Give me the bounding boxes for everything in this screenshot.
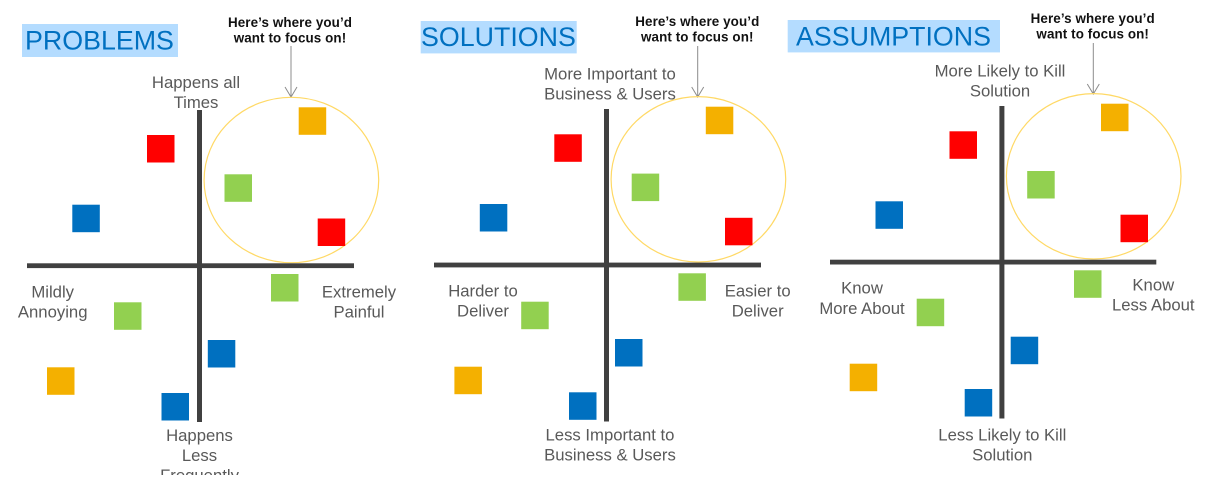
axis label: top: Happens all bbox=[152, 73, 240, 92]
axis label: left: Annoying bbox=[18, 302, 87, 322]
sticky notes bbox=[850, 104, 1148, 416]
vertical axis bbox=[999, 106, 1004, 418]
callout: focus area: Here’s where you’d bbox=[635, 14, 759, 29]
axis label: bottom: Business & Users bbox=[544, 446, 676, 465]
axis label: left: Deliver bbox=[457, 302, 509, 321]
arrow: to focus circle bbox=[285, 46, 297, 97]
heading: problems: PROBLEMS bbox=[25, 26, 174, 56]
panel: assumptions bbox=[788, 11, 1195, 465]
horizontal axis bbox=[434, 263, 761, 267]
callout: focus area: Here’s where you’d bbox=[228, 15, 352, 30]
callout: focus area: want to focus on! bbox=[640, 30, 754, 44]
axis label: bottom: Less bbox=[182, 446, 217, 465]
axis label: right: Know bbox=[1132, 276, 1175, 295]
sticky notes bbox=[454, 107, 752, 420]
axis label: bottom: Solution bbox=[972, 446, 1032, 465]
axis label: right: Painful bbox=[333, 302, 385, 322]
horizontal axis bbox=[27, 263, 354, 268]
focus circle bbox=[204, 97, 379, 263]
callout: focus area: want to focus on! bbox=[1035, 26, 1149, 42]
axis label: bottom: Less Important to bbox=[546, 426, 674, 445]
axis label: top: More Likely to Kill bbox=[935, 62, 1065, 81]
arrow: to focus circle bbox=[692, 46, 704, 97]
axis label: left: More About bbox=[819, 299, 905, 318]
axis label: right: Extremely bbox=[322, 282, 397, 302]
axis label: left: Mildly bbox=[31, 282, 75, 302]
heading: solutions: SOLUTIONS bbox=[421, 22, 576, 52]
axis label: top: Solution bbox=[970, 82, 1030, 101]
panel: solutions bbox=[421, 14, 791, 465]
axis label: right: Easier to bbox=[725, 282, 791, 301]
axis label: left: Know bbox=[841, 279, 884, 298]
axis label: left: Harder to bbox=[448, 282, 518, 301]
axis label: bottom: Less Likely to Kill bbox=[938, 426, 1066, 445]
vertical axis bbox=[197, 110, 202, 422]
panel: problems bbox=[18, 15, 397, 479]
vertical axis bbox=[604, 109, 609, 422]
heading: assumptions: ASSUMPTIONS bbox=[796, 21, 991, 51]
axis label: top: More Important to bbox=[544, 64, 676, 84]
focus circle bbox=[1006, 94, 1181, 259]
axis label: right: Deliver bbox=[732, 302, 784, 321]
arrow: to focus circle bbox=[1087, 43, 1099, 94]
horizontal axis bbox=[830, 260, 1156, 264]
sticky notes bbox=[47, 107, 345, 421]
axis label: right: Less About bbox=[1112, 296, 1195, 315]
axis label: top: Times bbox=[174, 93, 218, 112]
axis label: top: Business & Users bbox=[544, 84, 676, 104]
focus circle bbox=[611, 97, 786, 262]
callout: focus area: want to focus on! bbox=[233, 30, 346, 46]
axis label: bottom: Happens bbox=[166, 426, 233, 445]
callout: focus area: Here’s where you’d bbox=[1031, 11, 1155, 26]
